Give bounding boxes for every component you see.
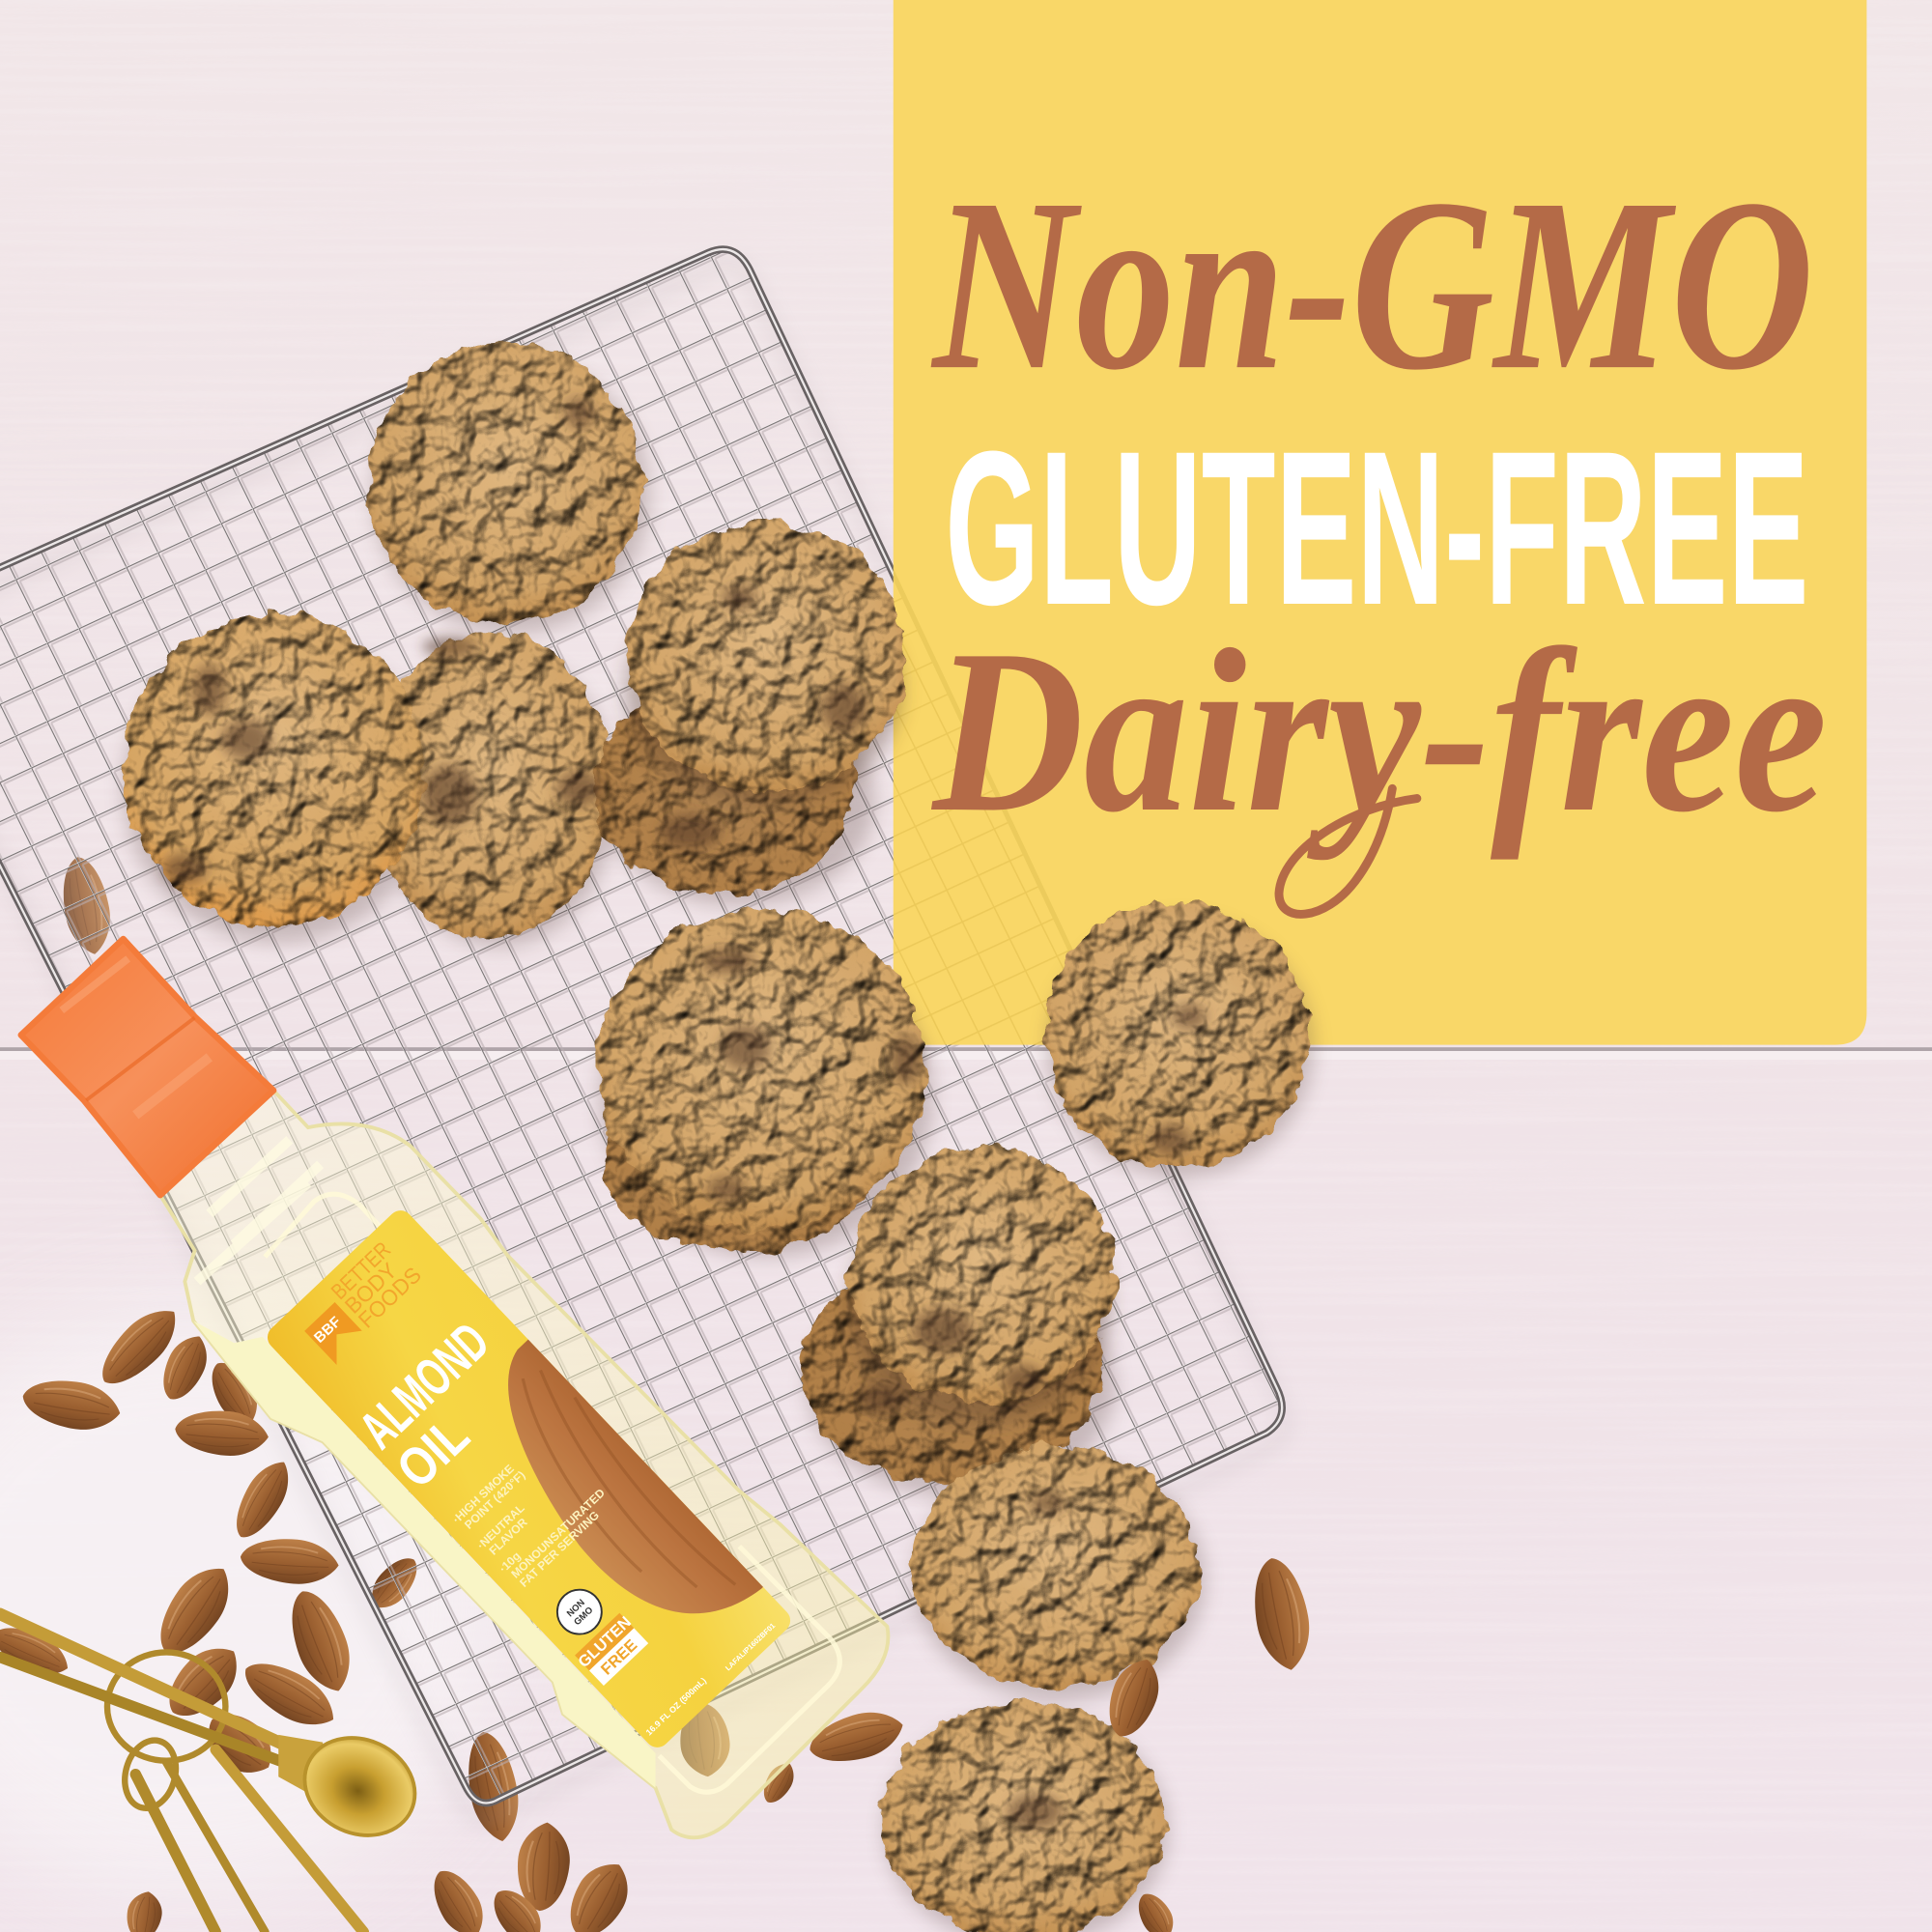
benefit list: ·HIGH SMOKE [450, 1462, 517, 1526]
heading line: Dairy-free: Dairy-free [931, 602, 1828, 861]
cookie: center stack top [596, 909, 926, 1230]
brand logo: BODY [340, 1258, 402, 1319]
brand logo: FOODS [354, 1262, 426, 1333]
bottle glass body [160, 1091, 888, 1837]
cookies on the rack [124, 343, 1314, 1932]
cookie: right stack bottom [801, 1257, 1101, 1484]
product name: ALMOND [348, 1311, 500, 1460]
gluten-free badge: FREE [597, 1635, 640, 1679]
benefit list: ·10g [497, 1549, 524, 1576]
net volume: 16.9 FL OZ (500mL) [644, 1676, 708, 1737]
brand logo: BBF [311, 1314, 345, 1347]
brand logo: BETTER [327, 1236, 395, 1304]
benefit list [450, 1428, 616, 1593]
gold measuring spoons [0, 1614, 431, 1932]
benefit list: ·NEUTRAL [474, 1501, 527, 1552]
wire cooling rack [0, 249, 1286, 1820]
shade between right stack [849, 1188, 1110, 1424]
cookie: stack top [627, 522, 906, 792]
product name: OIL [384, 1405, 480, 1499]
big almond artwork [508, 1339, 763, 1613]
cookie: bottom [881, 1701, 1164, 1932]
cookie: top [368, 343, 642, 623]
lot code: LAFALIP1602BF01 [724, 1621, 778, 1672]
orange cap [21, 939, 273, 1195]
glass inner ridge [265, 1194, 839, 1792]
cookie: large left [124, 613, 424, 926]
shade between stacked cookies [626, 577, 902, 804]
cookie: stack bottom right of rack top [594, 683, 855, 895]
non-gmo badge [548, 1580, 611, 1643]
benefit list: FLAVOR [487, 1516, 530, 1558]
cookie: lower right [912, 1446, 1200, 1688]
product name [348, 1311, 538, 1499]
almond oil bottle [21, 939, 888, 1837]
cookie shadows [124, 357, 1314, 1932]
cookie: right stack top [849, 1148, 1115, 1404]
gluten-free badge: GLUTEN [575, 1612, 635, 1671]
product label [263, 1193, 809, 1752]
oil strip below label [193, 1321, 656, 1788]
cookie: under left [370, 634, 611, 939]
brand logo [292, 1234, 426, 1365]
neck highlight [197, 1140, 321, 1282]
raisins and dark cracks [162, 398, 1207, 1829]
cookie: over panel corner [1045, 902, 1309, 1168]
non-gmo badge: NON [565, 1598, 587, 1619]
benefit list: POINT (420°F) [462, 1468, 527, 1532]
almonds behind the rack [56, 853, 526, 1845]
yellow text panel [893, 0, 1866, 1045]
benefit list: MONOUNSATURATED [508, 1486, 608, 1581]
benefit list: FAT PER SERVING [517, 1508, 602, 1590]
loose almonds [0, 1297, 1317, 1932]
swash: tail of the y in Dairy-free [1279, 788, 1417, 914]
cookie: center stack bottom [604, 1076, 875, 1253]
gluten-free badge [573, 1611, 650, 1688]
non-gmo badge: GMO [572, 1605, 596, 1628]
